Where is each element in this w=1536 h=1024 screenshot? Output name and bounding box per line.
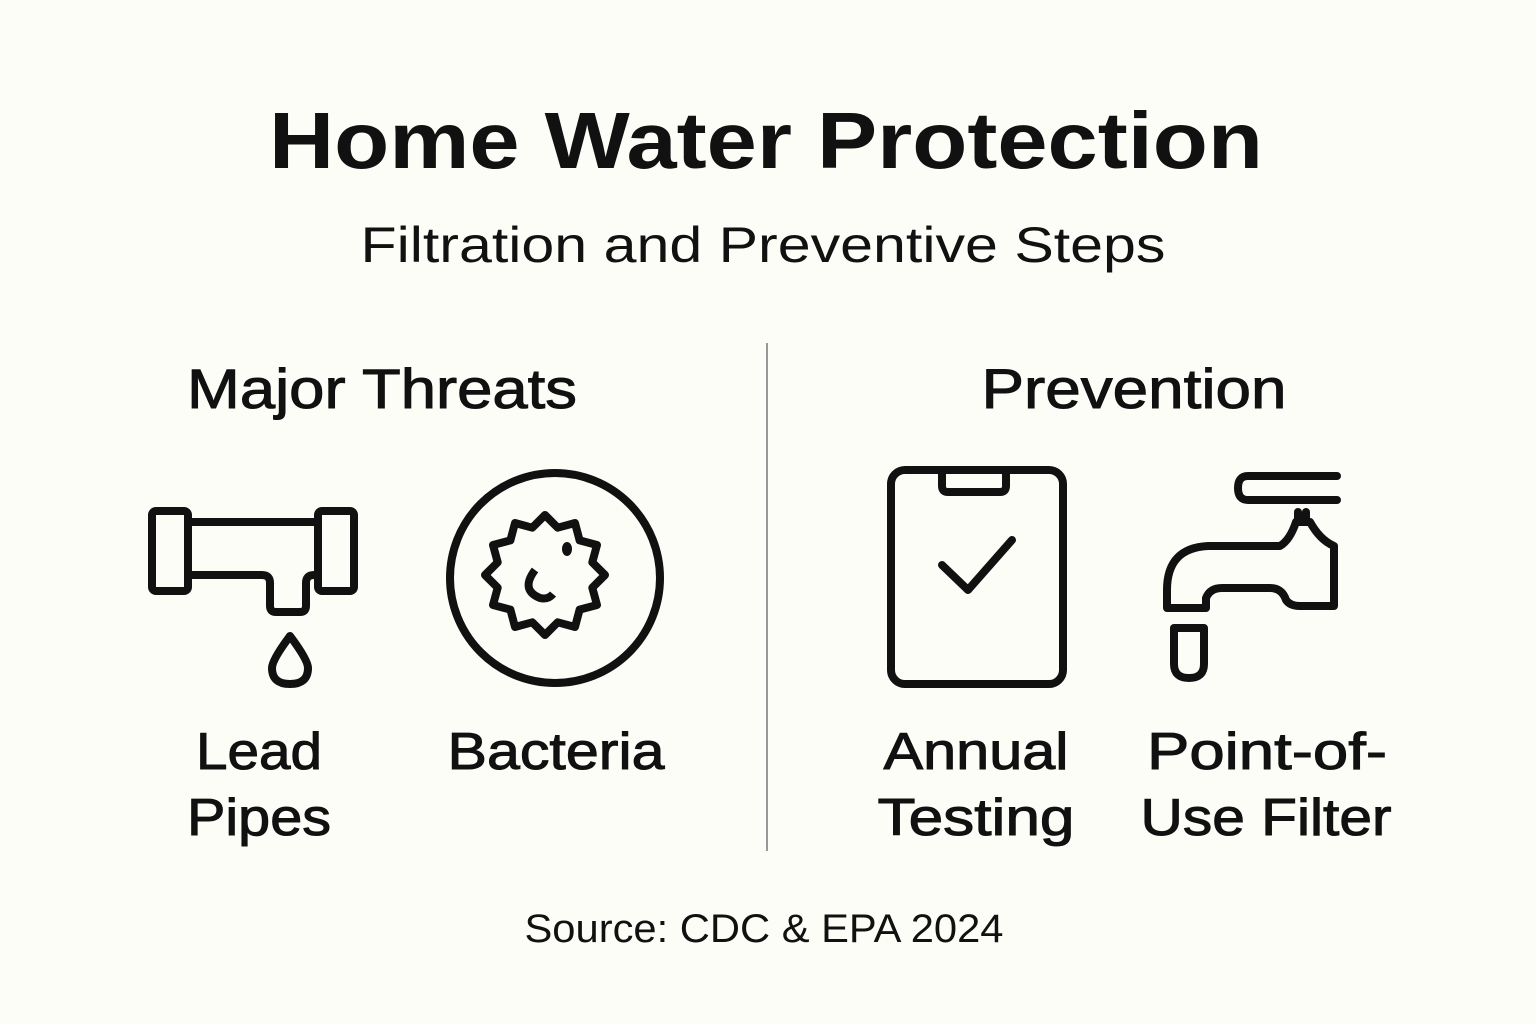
- panel: major threats: [152, 357, 665, 847]
- panel: prevention: Use Filter: [1140, 789, 1392, 847]
- panel: prevention: Testing: [878, 789, 1074, 847]
- subtitle: Filtration and Preventive Steps: [360, 217, 1166, 273]
- icon: bacteria: [450, 473, 660, 683]
- heading: major threats: Major Threats: [187, 357, 577, 420]
- icon: lead pipe: [152, 511, 354, 684]
- label: bacteria: Bacteria: [448, 723, 665, 781]
- icon: clipboard: [891, 470, 1063, 684]
- label: lead pipes: Lead: [196, 723, 322, 781]
- label: point-of-use filter: Point-of-: [1147, 723, 1387, 781]
- icon: faucet filter: [1167, 476, 1337, 678]
- label: annual testing: Annual: [884, 723, 1068, 781]
- heading: prevention: Prevention: [982, 357, 1286, 420]
- panel: prevention: [878, 357, 1392, 847]
- panel: major threats: Pipes: [187, 789, 331, 847]
- source note: Source: CDC & EPA 2024: [524, 907, 1004, 951]
- title: Home Water Protection: [269, 96, 1263, 185]
